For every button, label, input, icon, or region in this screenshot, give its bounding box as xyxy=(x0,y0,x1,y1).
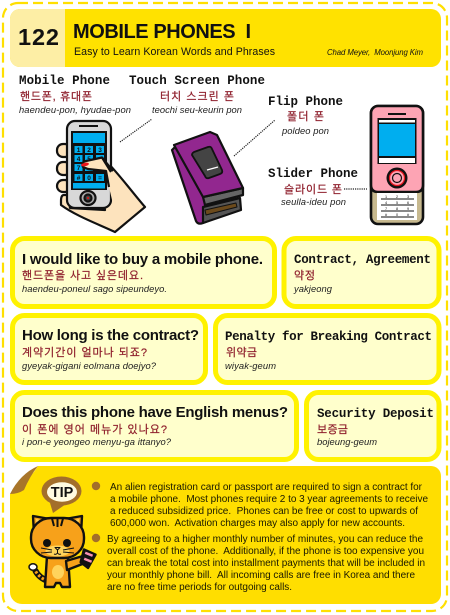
icon: slider phone: 7 xyxy=(385,207,387,211)
label: touch screen phone: 터치 스크린 폰 xyxy=(160,90,234,103)
panel: buy a mobile phone xyxy=(12,238,274,306)
panel: contract length: How long is the contract? xyxy=(22,327,199,344)
joypad xyxy=(386,168,408,188)
icon: slider phone: 0 xyxy=(396,213,398,217)
label: mobile phone: 핸드폰, 휴대폰 xyxy=(20,90,92,103)
thumb xyxy=(82,158,125,204)
authors: Chad Meyer, Moonjung Kim xyxy=(327,48,424,57)
keypad: 3 xyxy=(98,147,102,154)
label: touch screen phone: teochi seu-keurin pon xyxy=(152,104,242,115)
panel: security deposit: Security Deposit xyxy=(317,407,434,421)
keypad: 1 xyxy=(77,147,81,154)
icon: slider phone: 2 xyxy=(396,195,398,199)
tip text two: can break the total cost into installment payments that will be included in xyxy=(107,558,425,569)
icon: slider phone: # xyxy=(385,213,388,217)
icon: slider phone: # xyxy=(407,213,410,217)
head xyxy=(31,518,84,558)
keypad: 0 xyxy=(87,175,91,182)
icon: slider phone: 5 xyxy=(396,201,398,205)
header banner xyxy=(10,9,441,67)
panel: security deposit xyxy=(306,392,439,460)
tip text one: a reduced subsidized price. Phones can be free or cost to upwards of xyxy=(110,506,418,517)
home button xyxy=(80,191,96,205)
keypad: 7 xyxy=(77,165,81,172)
dotted leader lines xyxy=(120,119,367,189)
label: slider phone: seulla-ideu pon xyxy=(281,196,346,207)
keypad: 2 xyxy=(87,147,91,154)
panel: security deposit: bojeung-geum xyxy=(317,436,377,447)
icon: slider phone: 3 xyxy=(407,195,409,199)
phone screen xyxy=(379,124,415,156)
tip text one: a mobile phone. Most phones require 2 to 3 year agreements to receive xyxy=(110,494,428,505)
panel: contract length: gyeyak-gigani eolmana doejyo? xyxy=(22,360,157,371)
panel: penalty: Penalty for Breaking Contract xyxy=(225,330,432,344)
keypad: = xyxy=(98,175,102,182)
label: mobile phone: Mobile Phone xyxy=(19,74,110,88)
label: touch screen phone xyxy=(129,74,265,115)
icon: slider phone: 9 xyxy=(407,207,409,211)
arm xyxy=(66,556,85,570)
panel: English menus: i pon-e yeongeo menyu-ga ittanyo? xyxy=(22,436,172,447)
icon: slider phone xyxy=(371,106,423,224)
panel: buy a mobile phone: 핸드폰을 사고 싶은데요. xyxy=(22,269,143,282)
label: slider phone: Slider Phone xyxy=(268,167,358,181)
held phone xyxy=(80,549,96,569)
ears xyxy=(33,516,50,534)
label: flip phone: 폴더 폰 xyxy=(287,110,324,123)
panel: tip xyxy=(10,466,441,604)
thumbnail xyxy=(81,162,89,167)
speech bubble: TIP xyxy=(42,476,82,513)
fingers xyxy=(57,144,71,192)
panel: contract length: 계약기간이 얼마나 되죠? xyxy=(22,345,147,359)
tip text one: 600,000 won. Activation charges may also apply for new accounts. xyxy=(110,518,405,529)
tip text two: overall cost of the phone. Additionally, if the phone is too expensive you xyxy=(107,546,424,557)
keypad xyxy=(374,193,420,222)
label: slider phone: 슬라이드 폰 xyxy=(284,183,342,196)
bullet xyxy=(92,534,100,542)
keypad xyxy=(74,146,104,182)
lesson number: 122 xyxy=(18,24,59,50)
back cover xyxy=(172,146,208,224)
panel: buy a mobile phone: haendeu-poneul sago sipeundeyo. xyxy=(22,283,167,294)
icon: slider phone: 1 xyxy=(385,195,387,199)
label: mobile phone: haendeu-pon, hyudae-pon xyxy=(19,104,131,115)
label: flip phone xyxy=(268,95,343,136)
label: slider phone xyxy=(268,167,358,207)
label: mobile phone xyxy=(19,74,131,115)
tail xyxy=(35,570,48,581)
title: MOBILE PHONES I xyxy=(73,21,251,43)
panel: contract length xyxy=(12,316,206,382)
bullet xyxy=(92,482,100,490)
panel: contract: yakjeong xyxy=(293,283,333,294)
icon: hand holding mobile phone xyxy=(57,121,145,232)
front cover xyxy=(174,132,243,197)
face xyxy=(43,539,51,547)
palm xyxy=(61,157,145,232)
keypad: 4 xyxy=(77,156,81,163)
phone body xyxy=(67,121,111,208)
hinge xyxy=(203,188,243,205)
panel: contract: 약정 xyxy=(294,268,315,282)
tip text two: By agreeing to a higher monthly number of minutes, you can reduce the xyxy=(107,534,423,545)
screen xyxy=(71,131,107,190)
page fold xyxy=(10,466,38,494)
icon: slider phone: 8 xyxy=(396,207,398,211)
lower body xyxy=(203,198,241,223)
tip text two: your monthly phone bill. All incoming calls are free in Korea and there xyxy=(107,570,415,581)
icon: slider phone: 4 xyxy=(385,201,387,205)
label: flip phone: Flip Phone xyxy=(268,95,343,109)
stripes xyxy=(52,518,63,527)
outer display xyxy=(192,147,222,178)
keypad: # xyxy=(77,175,81,182)
panel: English menus: Does this phone have English menus? xyxy=(22,404,288,421)
panel: English menus: 이 폰에 영어 메뉴가 있나요? xyxy=(22,423,167,436)
panel: buy a mobile phone: I would like to buy a mobile phone. xyxy=(22,251,263,268)
label: flip phone: poldeo pon xyxy=(281,125,329,136)
tip text two: are no free time periods for outgoing calls. xyxy=(107,582,292,593)
label: touch screen phone: Touch Screen Phone xyxy=(129,74,265,88)
icon: cat holding phone xyxy=(29,516,96,587)
keypad: 5 xyxy=(87,156,91,163)
panel: penalty: 위약금 xyxy=(226,345,257,359)
panel: contract: Contract, Agreement xyxy=(294,253,431,267)
icon: slider phone: 6 xyxy=(407,201,409,205)
body xyxy=(45,556,70,587)
icon: flip phone xyxy=(172,132,243,224)
subtitle: Easy to Learn Korean Words and Phrases xyxy=(74,46,275,58)
panel: security deposit: 보증금 xyxy=(317,423,348,436)
panel: contract xyxy=(284,238,439,306)
panel: penalty: wiyak-geum xyxy=(225,360,276,371)
panel: penalty xyxy=(216,316,439,382)
speech bubble: TIP: TIP xyxy=(51,485,74,501)
panel: English menus xyxy=(12,392,296,460)
tip text one: An alien registration card or passport are required to sign a contract for xyxy=(110,482,423,493)
